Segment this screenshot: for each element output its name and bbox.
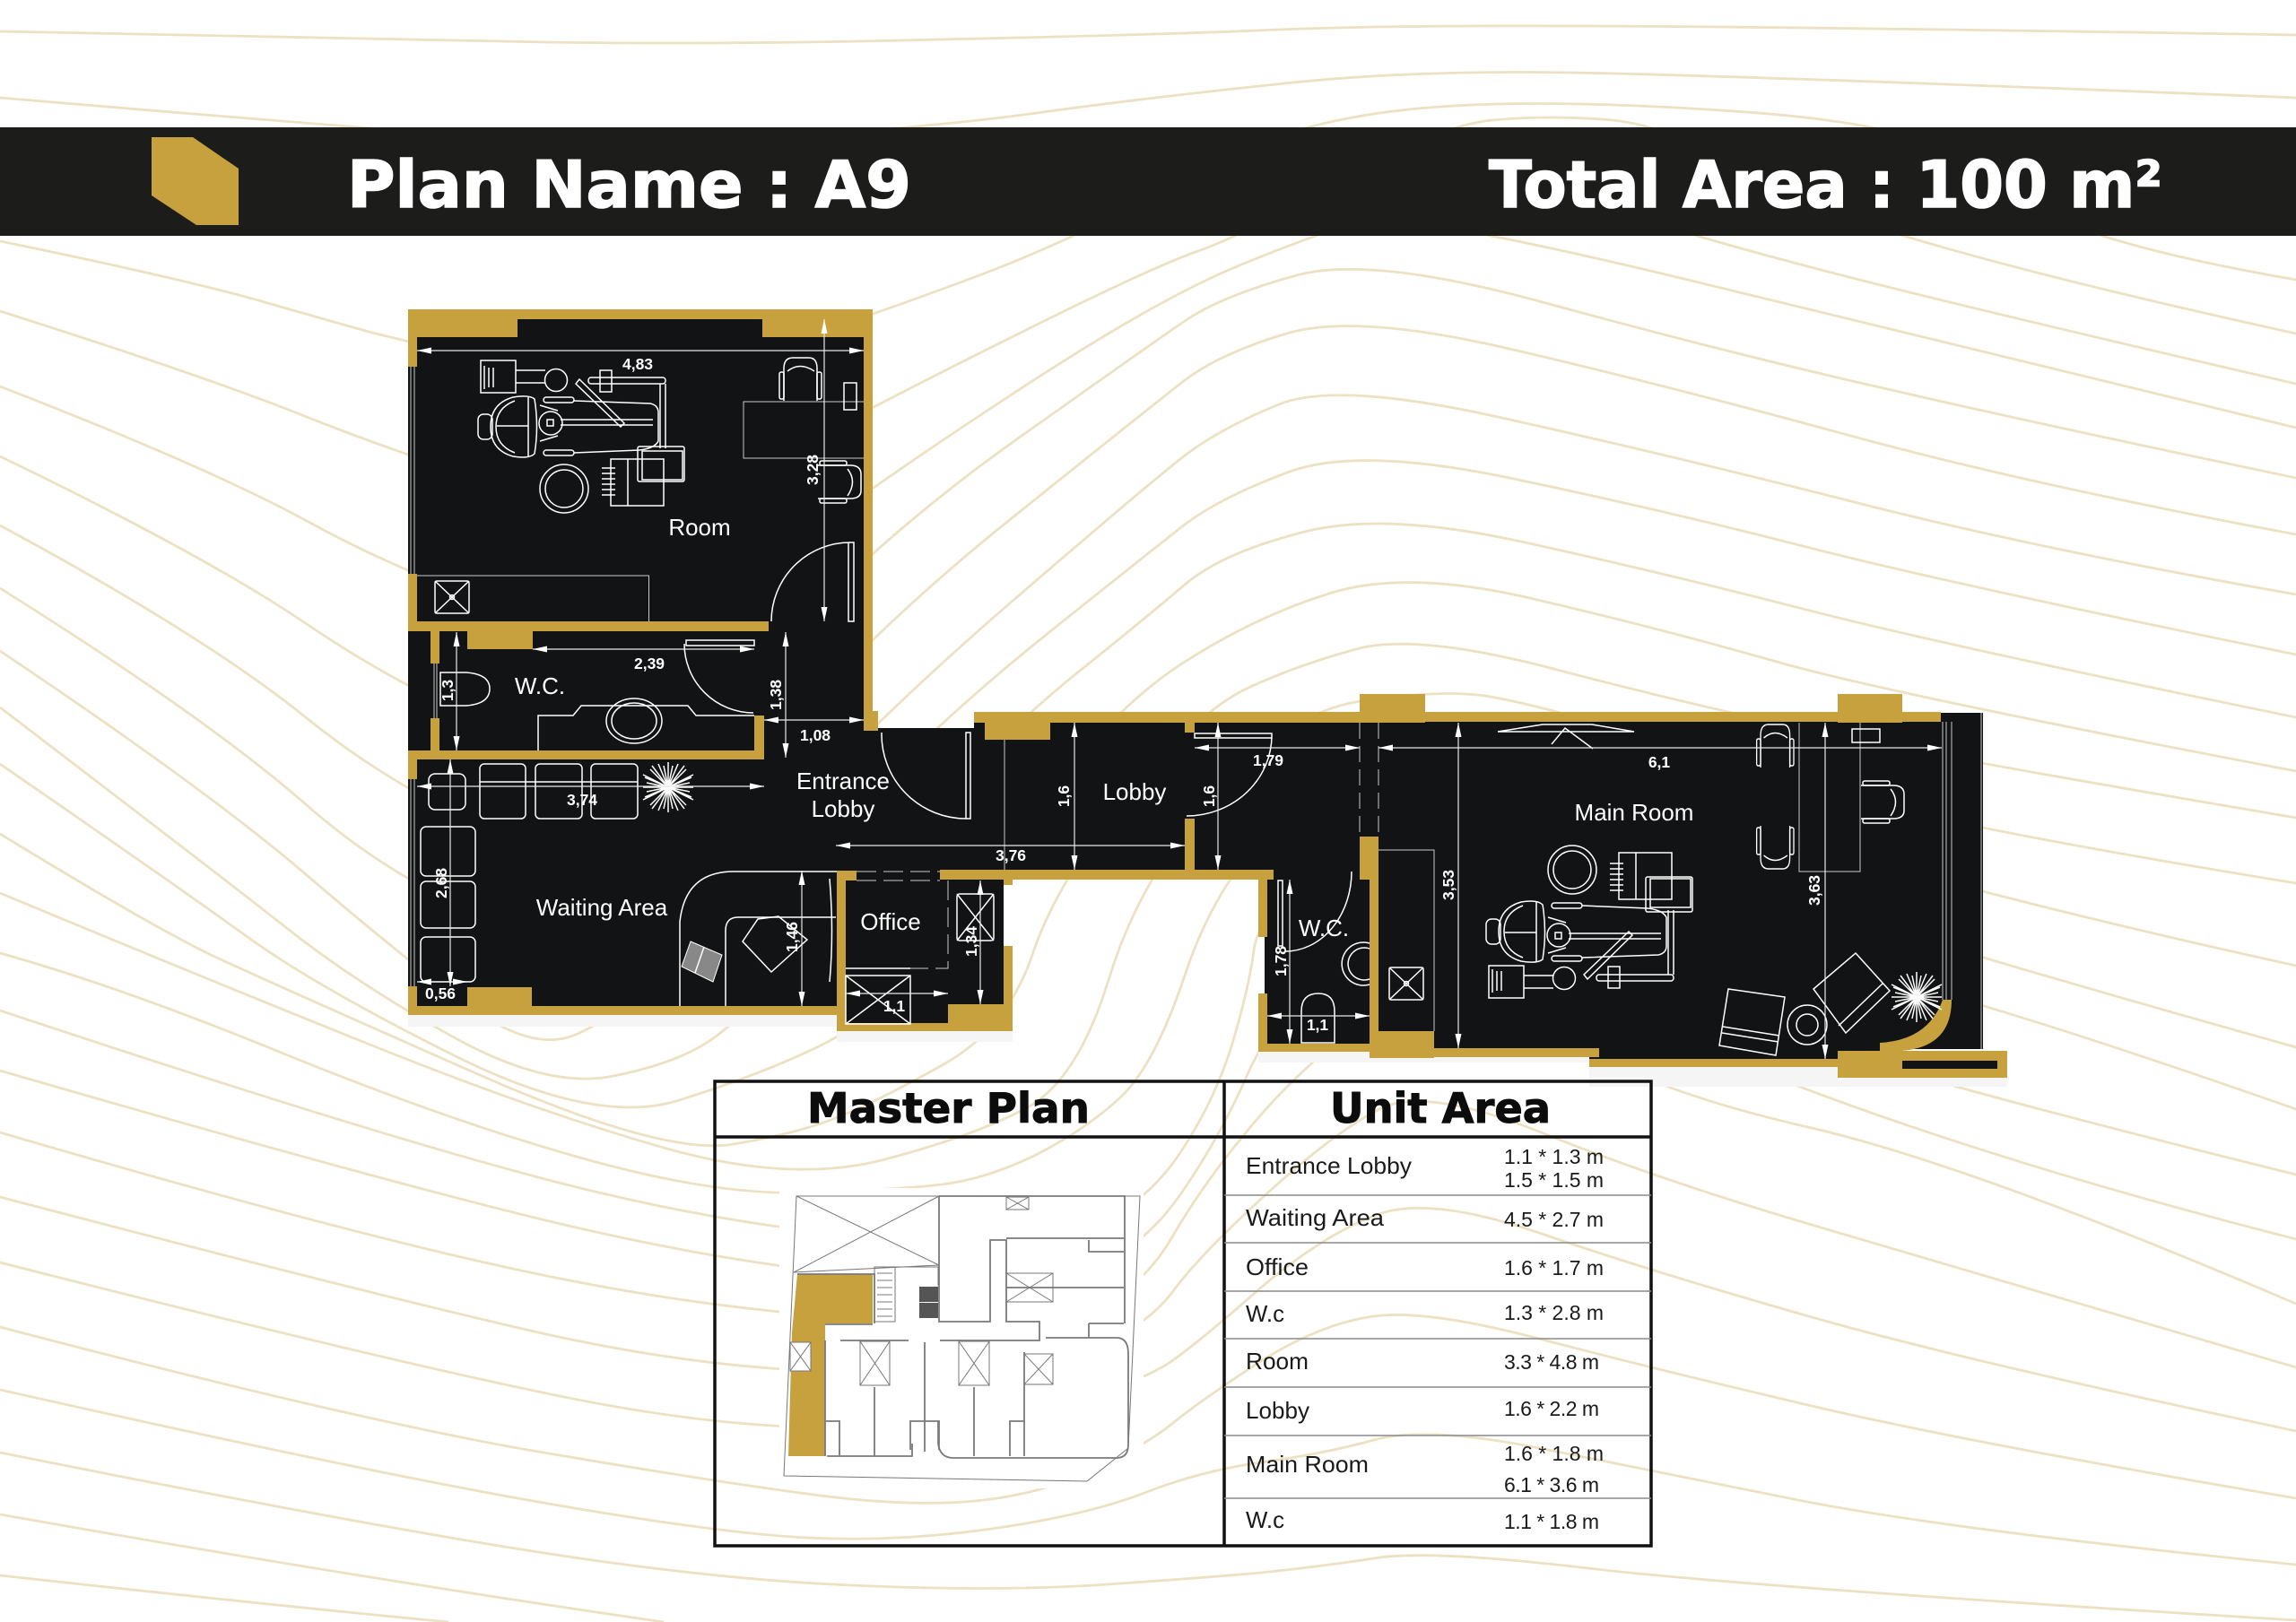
dimension: 2,68: 2,68 <box>432 868 450 898</box>
dimension: 6,1: 6,1 <box>1648 753 1670 771</box>
site outline <box>784 1196 1140 1481</box>
dimension: 1,1: 1,1 <box>1307 1016 1328 1034</box>
row labels <box>1246 1152 1412 1533</box>
dimension: 1,3 <box>439 632 457 750</box>
dimension: 1,1 <box>1267 1016 1370 1034</box>
row labels: W.c <box>1246 1506 1284 1533</box>
row values: 6.1 * 3.6 m <box>1504 1473 1599 1496</box>
table frame <box>715 1081 1651 1546</box>
dimension: 1,08 <box>764 720 864 744</box>
toilet <box>440 672 490 706</box>
wall screen <box>1498 724 1634 749</box>
dimension: 1,38 <box>767 632 786 758</box>
dimension: 3,63: 3,63 <box>1805 875 1823 906</box>
row values <box>1504 1145 1604 1533</box>
dimension: 1,3: 1,3 <box>439 680 457 701</box>
dimension: 0,56: 0,56 <box>425 984 456 1002</box>
dental chair unit <box>478 360 684 513</box>
reception chair <box>743 916 807 972</box>
building walls <box>797 1196 1128 1458</box>
label: Office: Office <box>860 908 921 935</box>
dimension: 3,28: 3,28 <box>804 455 822 485</box>
open window gaps <box>1004 885 1265 993</box>
basin <box>1342 942 1370 985</box>
row values: 3.3 * 4.8 m <box>1504 1350 1599 1374</box>
heading: Unit Area: Unit Area <box>1330 1084 1551 1132</box>
heading: plan name: Plan Name : A9 <box>347 147 911 222</box>
master plan drawing <box>784 1196 1140 1481</box>
curved partition <box>680 872 837 1006</box>
stair and lifts <box>874 1267 938 1322</box>
label: Room: Room <box>668 514 731 541</box>
dimension: 1,78: 1,78 <box>1272 946 1290 976</box>
door swing <box>1278 872 1352 951</box>
row labels: Waiting Area <box>1246 1204 1385 1231</box>
dimension: 0,56 <box>417 982 467 1002</box>
counter and sink <box>417 576 649 621</box>
dimension: 1,6 left: 1,6 <box>1055 785 1073 807</box>
row values: 1.3 * 2.8 m <box>1504 1301 1604 1324</box>
dental chair unit <box>1486 846 1692 998</box>
dimension: 1,79: 1,79 <box>1253 751 1283 769</box>
dimension: 1,1: 1,1 <box>883 997 905 1015</box>
dimension: 2,39: 2,39 <box>634 655 665 672</box>
heading: total area: Total Area : 100 m² <box>1489 147 2162 222</box>
unit utility rooms <box>826 1240 1124 1456</box>
label: Lobby: Lobby <box>1103 778 1166 805</box>
label: Entrance Lobby: Entrance <box>796 768 890 794</box>
soft shadow beneath walls <box>408 1015 2007 1087</box>
room: Office <box>846 872 994 1024</box>
master plan mask <box>779 1188 1144 1488</box>
shaft box <box>846 968 910 1024</box>
dimension: 1,1 <box>846 993 948 1015</box>
dimension: 1,34: 1,34 <box>962 926 980 957</box>
dimension: 3,76: 3,76 <box>996 846 1026 864</box>
row values: 1.1 * 1.3 m <box>1504 1145 1604 1168</box>
row values: 1.6 * 1.7 m <box>1504 1256 1604 1279</box>
desk and chairs <box>744 358 864 503</box>
door swing <box>684 640 754 713</box>
label: Entrance Lobby: Lobby <box>812 795 874 822</box>
dimension: 3,74: 3,74 <box>567 791 597 809</box>
label: W.C.: W.C. <box>515 672 565 699</box>
dimension: 1,46: 1,46 <box>783 922 801 952</box>
screen <box>830 879 832 982</box>
toilet <box>1301 993 1335 1043</box>
dimension: 1,08: 1,08 <box>800 726 831 744</box>
heading: Master Plan: Master Plan <box>807 1084 1090 1132</box>
desk and chairs <box>1757 723 1904 872</box>
dimension: 3,53: 3,53 <box>1439 870 1457 900</box>
row values: 1.5 * 1.5 m <box>1504 1168 1604 1192</box>
plant <box>1892 972 1942 1022</box>
panel: floor plan <box>408 309 2007 1087</box>
table rows <box>1224 1195 1651 1498</box>
row values: 1.6 * 2.2 m <box>1504 1397 1599 1420</box>
row labels: Main Room <box>1246 1451 1369 1478</box>
row labels: Office <box>1246 1253 1309 1280</box>
dimension: 1,6 right: 1,6 <box>1200 785 1218 807</box>
walls and pillars <box>408 309 2007 1078</box>
partition and doorway <box>846 872 948 968</box>
thin column line <box>1004 740 1005 870</box>
sofas and side table <box>421 764 638 982</box>
highlighted unit <box>788 1274 873 1456</box>
room: Main Room <box>1360 723 1942 1059</box>
row labels: Room <box>1246 1348 1309 1375</box>
icon: gold logo <box>152 137 239 225</box>
label: Entrance Lobby <box>796 768 890 822</box>
dimension: 1,34 <box>962 880 980 1004</box>
dimension: 1,38: 1,38 <box>767 680 785 710</box>
row values: 1.1 * 1.8 m <box>1504 1510 1599 1533</box>
panel: master plan and unit area table <box>715 1081 1651 1546</box>
small shaft <box>957 894 994 941</box>
room: Lobby <box>836 723 1360 870</box>
window and glass lines <box>411 367 1981 1049</box>
vanity and basin <box>538 698 754 750</box>
room: Entrance Lobby <box>764 632 970 822</box>
row labels: W.c <box>1246 1300 1284 1327</box>
label: Waiting Area: Waiting Area <box>536 894 668 921</box>
row values: 1.6 * 1.8 m <box>1504 1442 1604 1465</box>
book stack <box>682 941 722 982</box>
label: Main Room: Main Room <box>1575 799 1693 826</box>
dimension: 4,83: 4,83 <box>622 355 653 373</box>
room: Waiting Area <box>417 759 837 1006</box>
row values: 4.5 * 2.7 m <box>1504 1208 1604 1231</box>
wet-core boxes <box>790 1197 1053 1385</box>
label: W.C.: W.C. <box>1299 915 1349 941</box>
cabinet and sink <box>1378 850 1434 1031</box>
door swing <box>1187 733 1272 816</box>
lounge armchairs and table <box>1719 953 1890 1055</box>
room: W.C. <box>439 632 754 750</box>
room: Room <box>417 319 864 621</box>
room: second W.C. <box>1267 872 1370 1044</box>
header bar <box>0 127 2296 236</box>
floor slab <box>408 309 1983 1067</box>
row labels: Entrance Lobby <box>1246 1152 1412 1179</box>
passage dashes <box>1360 723 1378 837</box>
row labels: Lobby <box>1246 1397 1309 1424</box>
door swing <box>882 733 970 819</box>
door swing <box>771 542 854 621</box>
plant <box>643 762 693 812</box>
